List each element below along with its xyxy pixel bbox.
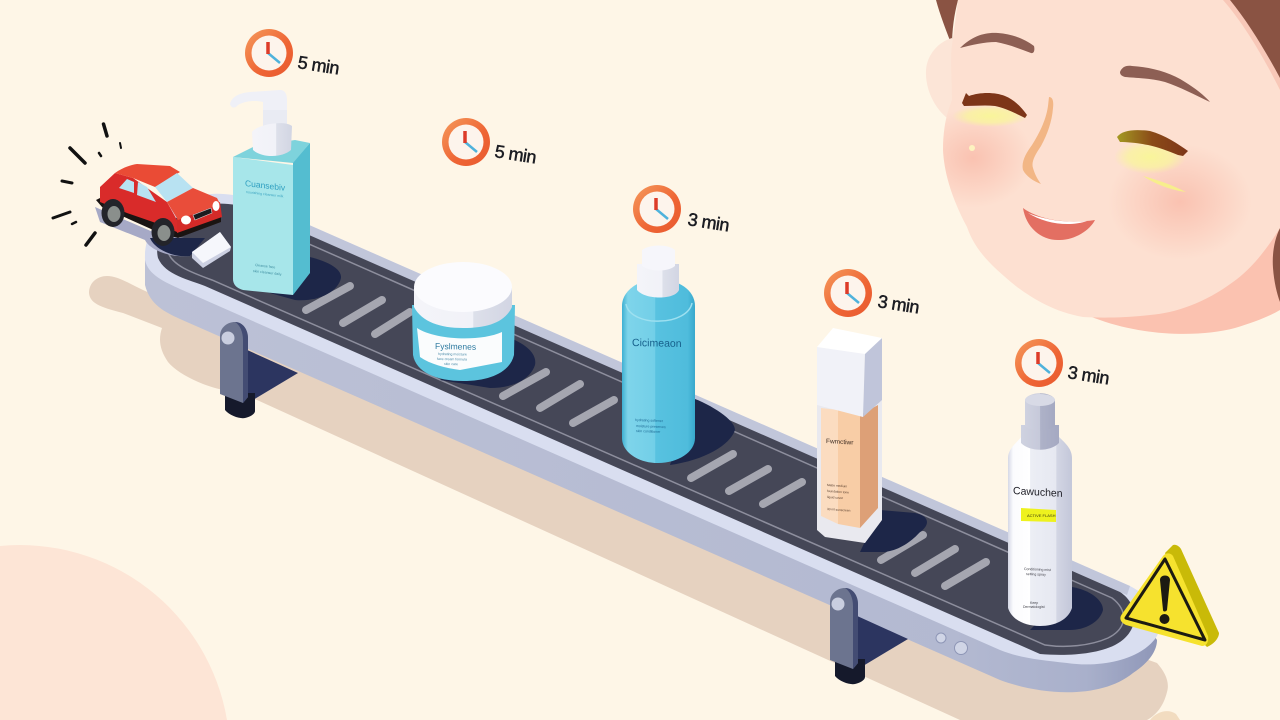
jar small label: hydrating moisture (438, 352, 467, 357)
small shadow blob (1150, 711, 1180, 720)
minute hand (268, 53, 280, 63)
glass body (817, 400, 882, 543)
conveyor ground shadow (89, 276, 1168, 720)
brand label: Cuansebiv (245, 178, 286, 193)
car front (177, 202, 222, 233)
shoulder ring (626, 303, 692, 321)
cap (642, 246, 675, 270)
liquid right (860, 405, 878, 528)
clock face (1022, 346, 1056, 380)
hour hand (654, 198, 658, 210)
pump neck (263, 104, 287, 132)
headlight (212, 201, 220, 211)
label line: nourishing cleanser milk (246, 190, 284, 199)
rubber foot (225, 393, 255, 418)
footer label: Cleanse face (255, 263, 275, 269)
belt shadow under car (150, 238, 205, 256)
hour hand (463, 131, 467, 143)
hair lower right (1273, 228, 1280, 302)
clock icon (633, 185, 681, 233)
small label: setting spray (1026, 572, 1046, 577)
cap right (863, 338, 882, 417)
left brow (960, 33, 1034, 53)
upper rim shade (250, 199, 1130, 595)
belt groove lines (168, 218, 1124, 646)
liquid centre (838, 410, 860, 528)
conveyor belt (145, 194, 1159, 692)
minute hand (656, 209, 668, 219)
left closed eye (962, 93, 1027, 118)
cream jar (412, 262, 535, 388)
label (417, 328, 502, 370)
clock ring (824, 269, 872, 317)
bottle shadow (670, 397, 735, 465)
clock icon (824, 269, 872, 317)
cap top (817, 328, 882, 354)
car side (100, 173, 177, 232)
clock icon (245, 29, 293, 77)
mouth (1023, 208, 1095, 240)
bracket dark edge (845, 588, 858, 669)
clock face (252, 36, 286, 70)
tire (102, 199, 124, 227)
headlight (181, 216, 191, 224)
right face (293, 143, 310, 295)
car underbody (96, 198, 221, 238)
leg brace (850, 615, 908, 666)
right closed eye (1117, 130, 1188, 156)
small label: skin conditioner (636, 429, 661, 434)
neck (1060, 180, 1280, 334)
pump collar (252, 123, 292, 156)
small label: foundation tone (827, 489, 849, 495)
lid (414, 288, 512, 328)
front wheel (152, 218, 174, 246)
collar (1021, 425, 1059, 450)
exclamation dot (1160, 614, 1170, 624)
hub (108, 206, 120, 222)
head (943, 0, 1280, 318)
tire (152, 218, 174, 246)
lid top (414, 262, 512, 312)
collar (637, 264, 679, 298)
jar small label: skin care (444, 362, 458, 366)
brand label: Cawuchen (1013, 485, 1063, 500)
bolt (222, 332, 234, 344)
rivet (936, 633, 946, 643)
white block top (192, 232, 231, 263)
person's smiling face (913, 0, 1280, 334)
triangle side (1165, 545, 1219, 647)
teeth (1028, 213, 1087, 224)
belt surface (157, 204, 1134, 655)
right eye glow (1114, 140, 1186, 174)
brand label: Cicimeaon (632, 337, 682, 350)
exclamation bar (1160, 576, 1170, 612)
time label: 5 min (493, 141, 538, 167)
time label: 3 min (1066, 362, 1111, 388)
clock face (448, 124, 484, 160)
grille (193, 208, 212, 220)
side window (119, 179, 134, 193)
small label: hydrating softener (635, 418, 664, 423)
clock ring (245, 29, 293, 77)
white spray bottle (1008, 393, 1103, 630)
hour hand (845, 282, 849, 294)
top face (233, 140, 310, 163)
blue toner bottle (622, 246, 735, 465)
yellow badge (1021, 508, 1056, 522)
timer 5: 3 min (1015, 339, 1111, 388)
bottle shadow (270, 256, 341, 300)
body (1008, 436, 1072, 626)
clock face (830, 276, 866, 310)
hub (158, 225, 170, 241)
time label: 3 min (876, 291, 921, 317)
cheek sparkle (969, 145, 975, 151)
clock icon (442, 118, 490, 166)
triangle inner border (1126, 559, 1205, 640)
left leg (220, 322, 298, 418)
small label: Conditioning mist (1024, 567, 1051, 572)
pump nozzle (230, 90, 287, 110)
right brow (1120, 66, 1210, 102)
right leg (830, 588, 908, 684)
timer 3: 3 min (633, 185, 731, 235)
ear (926, 38, 965, 118)
cheek light streak (1143, 176, 1186, 192)
time label: 5 min (296, 52, 341, 78)
pink edge (1216, 0, 1280, 110)
hood (167, 188, 220, 220)
cap top (1025, 394, 1055, 406)
badge text: ACTIVE FLASH (1027, 513, 1056, 518)
minute hand (1038, 363, 1050, 373)
rubber foot (835, 659, 865, 684)
cheeks (943, 122, 1234, 246)
side window (137, 182, 156, 202)
brand label: Fwmctiwr (826, 438, 854, 447)
hair right (1230, 0, 1280, 78)
small label: Matte medium (827, 483, 848, 488)
bracket (830, 588, 858, 669)
minute hand (465, 142, 477, 152)
bracket dark edge (235, 322, 248, 403)
clock ring (1015, 339, 1063, 387)
rivet (954, 642, 968, 654)
small label: Keep (1030, 601, 1038, 605)
foundation bottle (817, 328, 927, 552)
bottle shadow (1030, 587, 1103, 630)
rear wheel (102, 199, 124, 227)
small label: Dermatologist (1023, 605, 1045, 609)
impact lines (53, 124, 121, 245)
jar small label: face cream formula (437, 357, 467, 362)
liquid left (821, 408, 838, 524)
clock ring (442, 118, 490, 166)
clock icon (1015, 339, 1063, 387)
bracket (220, 322, 248, 403)
windshield (155, 173, 193, 202)
timer 1: 5 min (245, 29, 341, 78)
small label: liquid cover (827, 495, 844, 500)
jar glass (412, 305, 515, 381)
pump bottle (230, 90, 341, 300)
frame top rim (145, 194, 1159, 664)
jar shadow (440, 338, 535, 388)
hour hand (1036, 352, 1040, 364)
timer 2: 5 min (442, 118, 538, 167)
left eye glow (952, 105, 1028, 127)
car roof (115, 164, 180, 187)
bottle shadow (860, 510, 927, 552)
right cheek (1126, 159, 1234, 246)
minute hand (847, 293, 859, 303)
small label: 30 ml sunscreen (827, 507, 851, 513)
frame side (145, 255, 1157, 692)
triangle front (1120, 553, 1208, 646)
hour hand (266, 42, 270, 54)
timer 4: 3 min (824, 269, 921, 317)
belt slats (306, 286, 986, 586)
left cheek (943, 122, 1018, 196)
footer label: skin cleanser daily (253, 269, 282, 276)
bolt (832, 598, 844, 610)
clock ring (633, 185, 681, 233)
cap left (817, 347, 865, 417)
clock face (640, 192, 674, 226)
car shadow (95, 207, 200, 256)
left face (233, 157, 293, 295)
red toy car stuck at belt start (53, 124, 231, 268)
decorative peach circle (0, 545, 227, 720)
leg brace (240, 349, 298, 400)
nose (1023, 97, 1053, 184)
cap (1025, 393, 1055, 430)
white block (192, 232, 231, 268)
jar brand label: Fyslmenes (435, 341, 476, 352)
body (622, 279, 695, 463)
time label: 3 min (686, 209, 731, 235)
warning triangle (1120, 545, 1219, 647)
hair left (936, 0, 958, 46)
small label: moisture preserves (636, 424, 666, 429)
